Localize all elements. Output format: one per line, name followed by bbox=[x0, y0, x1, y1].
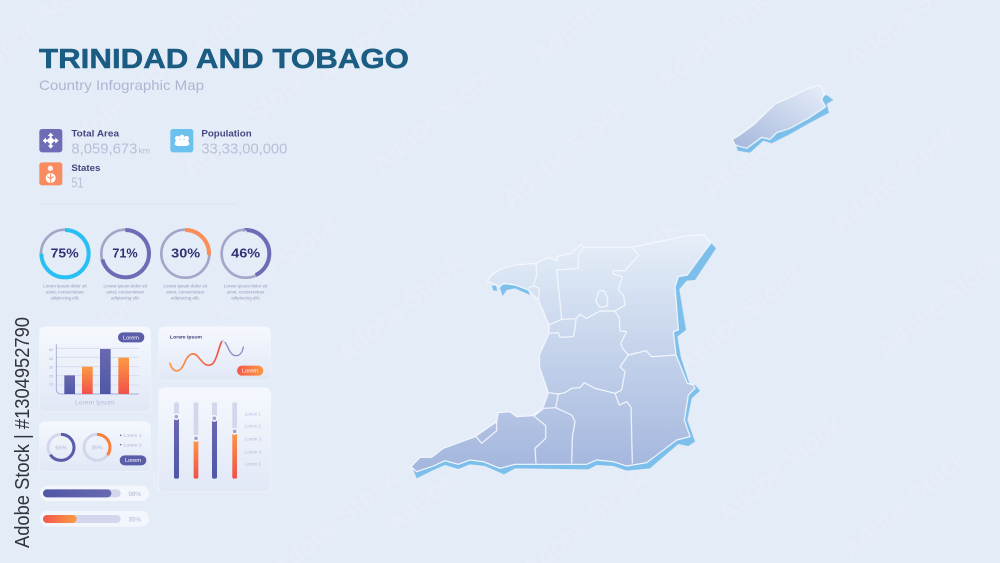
panel: slider chart card: Lorem 4 bbox=[245, 449, 261, 454]
icon: population bbox=[170, 129, 193, 152]
stat: total area: 8,059,673 bbox=[71, 141, 137, 157]
stat: states: States bbox=[71, 163, 100, 173]
stat: total area: Total Area bbox=[71, 129, 120, 139]
panel: bar chart card: 30 bbox=[49, 364, 54, 369]
stock watermarks: Adobe Stock bbox=[382, 419, 517, 539]
panel: key statistics bbox=[39, 129, 287, 300]
map: Trinidad bbox=[411, 235, 716, 478]
map shadow bbox=[413, 243, 716, 478]
stock watermarks: Adobe Stock bbox=[207, 209, 342, 329]
donut stat: 46%: amet, consectetuer bbox=[227, 289, 265, 294]
stat: total area: km bbox=[138, 146, 150, 155]
panel: slider chart card: Lorem 3 bbox=[245, 437, 261, 442]
panel: small donuts card: 35% bbox=[91, 445, 103, 451]
progress bar: 98%: 98% bbox=[128, 492, 142, 498]
stat: population: Population bbox=[201, 129, 252, 139]
stat: population: 33,33,00,000 bbox=[201, 141, 287, 157]
panel: bar chart card bbox=[39, 327, 151, 412]
donut stat: 75%: adipiscing elit. bbox=[51, 295, 79, 300]
donut stat: 46%: 46% bbox=[231, 246, 260, 261]
panel: slider chart card: Lorem 1 bbox=[245, 412, 261, 417]
stock watermarks: Adobe Stock bbox=[672, 259, 807, 379]
panel: line chart card: Lorem Ipsum bbox=[170, 335, 203, 341]
donut stat: 75%: 75% bbox=[51, 246, 79, 261]
donut stat: 30%: amet, consectetuer bbox=[166, 289, 205, 294]
panel: slider chart card: Lorem 2 bbox=[245, 423, 261, 428]
title: TRINIDAD AND TOBAGO bbox=[39, 43, 409, 74]
panel: dashboard widgets bbox=[39, 327, 271, 527]
subtitle: Country Infographic Map bbox=[39, 77, 204, 93]
donut stat: 46% bbox=[222, 230, 270, 300]
panel: small donuts card: 65% bbox=[55, 445, 67, 451]
stock watermarks: Adobe Stock bbox=[827, 119, 962, 239]
donut stat: 71% bbox=[101, 230, 149, 300]
stock watermarks: Adobe Stock bbox=[142, 379, 277, 499]
donut stat: 75% bbox=[41, 230, 89, 300]
stat: total area bbox=[71, 129, 150, 157]
stock watermarks: Adobe Stock bbox=[547, 214, 682, 334]
panel: small donuts card: Lorem 2 bbox=[123, 442, 142, 448]
panel: bar chart card: 40 bbox=[49, 356, 54, 361]
stock watermarks: Adobe Stock bbox=[712, 409, 847, 529]
icon: total area bbox=[39, 129, 62, 152]
donut stat: 71%: adipiscing elit. bbox=[111, 295, 140, 300]
panel: line chart card bbox=[159, 327, 271, 381]
stock watermarks: Adobe Stock bbox=[332, 249, 467, 369]
panel: slider chart card: Lorem 5 bbox=[245, 461, 261, 466]
progress bar: 35%: 35% bbox=[128, 517, 142, 523]
panel: bar chart card: 20 bbox=[49, 373, 54, 378]
map: Tobago bbox=[732, 85, 833, 153]
stat: states: 51 bbox=[71, 176, 83, 192]
panel: bar chart card: Lorem Ipsum bbox=[75, 401, 115, 407]
donut stat: 71%: amet, consectetuer bbox=[106, 289, 145, 294]
donut stat: 30%: 30% bbox=[171, 246, 200, 261]
stock watermarks: Adobe Stock bbox=[697, 84, 832, 204]
Tobago shadow bbox=[736, 95, 833, 153]
map land bbox=[411, 235, 711, 472]
panel: bar chart card: Lorem bbox=[123, 335, 139, 341]
donut stat: 71%: Lorem ipsum dolor sit bbox=[104, 283, 148, 288]
donut stat: 71%: 71% bbox=[112, 246, 138, 261]
panel: small donuts card: Lorem 1 bbox=[123, 433, 142, 439]
panel: slider chart card bbox=[159, 388, 271, 492]
donut stat: 30%: Lorem ipsum dolor sit bbox=[164, 283, 208, 288]
panel: bar chart card: 10 bbox=[49, 382, 54, 387]
stock watermarks: Adobe Stock bbox=[177, 64, 312, 184]
vertical stock id text: Adobe Stock | #1304952790 bbox=[12, 317, 34, 548]
panel: bar chart card: 50 bbox=[49, 347, 54, 352]
progress bar: 35% bbox=[40, 511, 149, 527]
donut stat: 75%: amet, consectetuer bbox=[46, 289, 84, 294]
map district borders bbox=[476, 247, 676, 463]
stat: population bbox=[201, 129, 287, 157]
donut stat: 75%: Lorem ipsum dolor sit bbox=[43, 283, 87, 288]
stock watermarks: Adobe Stock bbox=[17, 279, 152, 399]
stock watermarks: Adobe Stock bbox=[57, 39, 192, 159]
panel: line chart card: Lorem bbox=[242, 369, 258, 375]
donut stat: 46%: Lorem ipsum dolor sit bbox=[224, 283, 268, 288]
panel: small donuts card: Lorem bbox=[125, 458, 141, 464]
panel: small donuts card bbox=[39, 422, 151, 472]
donut stat: 30% bbox=[161, 230, 209, 300]
stock watermarks: Adobe Stock bbox=[517, 354, 652, 474]
stock watermarks: Adobe Stock bbox=[497, 94, 632, 214]
stat: states bbox=[71, 163, 100, 192]
stock watermarks: Adobe Stock bbox=[367, 59, 502, 179]
icon: states bbox=[39, 162, 62, 185]
progress bar: 98% bbox=[40, 486, 149, 501]
Tobago land bbox=[732, 85, 826, 148]
donut stat: 46%: adipiscing elit. bbox=[231, 295, 260, 300]
donut stat: 30%: adipiscing elit. bbox=[171, 295, 200, 300]
stock watermarks: Adobe Stock bbox=[837, 444, 972, 563]
